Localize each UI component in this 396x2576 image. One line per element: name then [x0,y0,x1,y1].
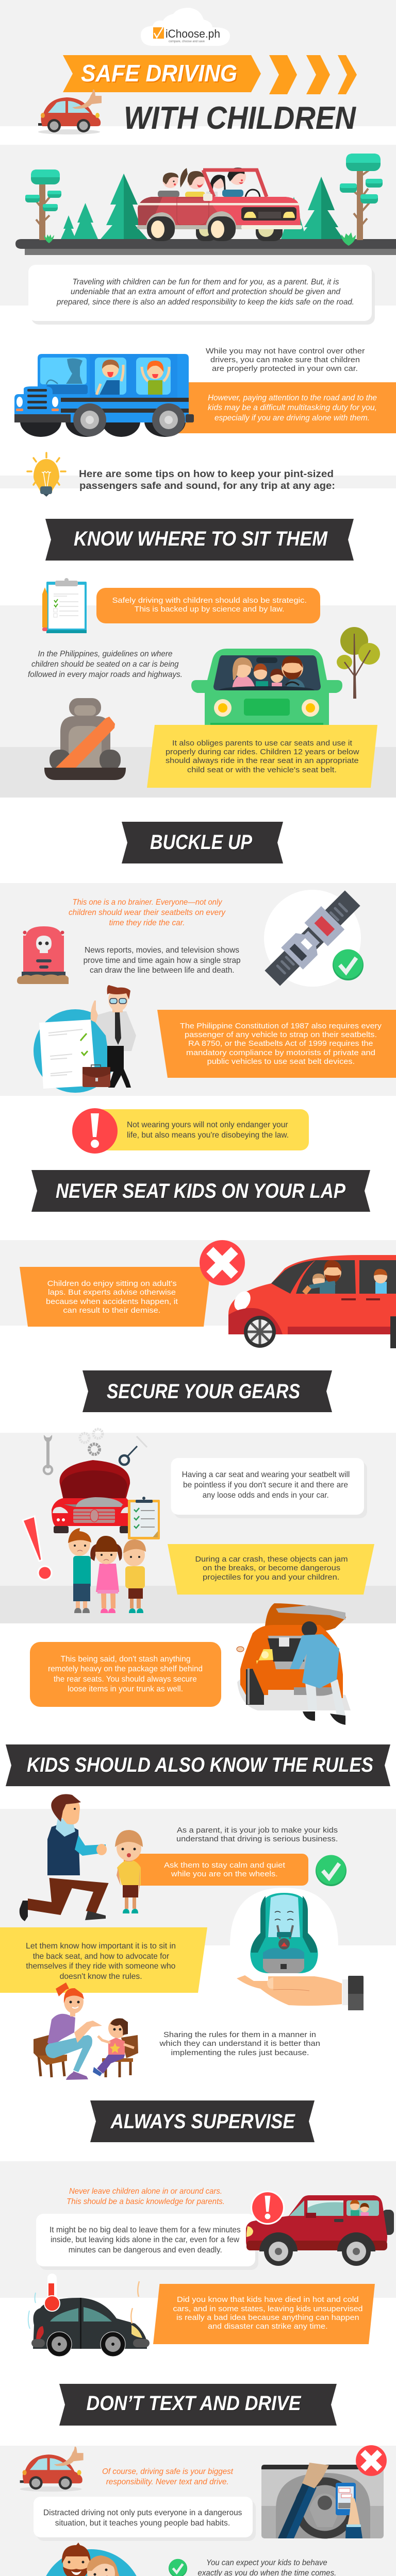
callout: dangerous projectiles: on the breaks, or become dangerous [203,1564,340,1572]
section: don't text and drive [20,2384,387,2576]
callout: car seats law: properly during car rides. Children 12 years or below [166,748,359,756]
red family car [137,167,302,241]
text: sharing the rules: Sharing the rules for them in a manner in [163,2030,316,2039]
callout: back seat: doesn't know the rules. [60,1972,142,1981]
icon: exclamation [23,1516,52,1580]
callout: strategic: This is backed up by science and by law. [134,605,285,614]
text: news reports: can draw the line between life and death. [90,966,235,975]
heading banner: SECURE YOUR GEARS [107,1380,300,1403]
text: never leave children [67,2187,225,2206]
callout: back seat [0,1927,207,1993]
callout: car seats law: child seat or with the vehicle's seat belt. [187,766,337,774]
icon: clipboard [42,578,87,633]
callout: back seat: the back seat, and how to advocate for [33,1952,170,1961]
heading banner [90,2100,315,2142]
callout: constitution and RA 8750: mandatory compliance by motorists of private and [186,1048,375,1057]
callout: constitution and RA 8750: RA 8750, or the Seatbelts Act of 1999 requires the [188,1039,373,1048]
callout: constitution and RA 8750: The Philippine Constitution of 1987 also requires every [180,1022,382,1030]
text: philippine guidelines: followed in every major roads and highways. [28,670,183,679]
logo cloud: compare, choose and save [169,40,205,43]
heading banner: ALWAYS SUPERVISE [110,2110,295,2133]
text: never leave children: This should be a basic knowledge for parents. [67,2197,225,2206]
icon: green car front with family [191,649,342,725]
text: sharing the rules [159,2030,320,2057]
heading banner [45,519,354,561]
panel: multitasking callout: kids may be a difficult multitasking duty for you, [208,403,377,412]
callout: back seat: themselves if they ride with someone who [26,1962,175,1971]
text: other drivers: drivers, you can make sure that children [210,355,360,364]
panel: multitasking callout: especially if you are driving alone with them. [214,414,370,422]
callout: dangerous projectiles [168,1544,374,1595]
girl in window [142,361,169,395]
icon: tree [337,627,380,698]
chairs [34,2035,138,2077]
illustration: dark car with thermometer [28,2274,150,2357]
panel: multitasking callout [175,382,396,433]
heading banner [82,1370,332,1412]
text: other drivers: While you may not have control over other [206,347,365,355]
text: philippine guidelines [28,650,183,679]
callout: car seats law: should always ride in the rear seat in an appropriate [166,756,359,765]
hero road scene [15,154,396,255]
card: loose odds and ends [171,1458,367,1518]
callout: hot and cold cars: is really a bad idea because anything can happen [176,2313,359,2322]
icon: car seat with belt [44,698,126,780]
card: loose odds and ends: be pointless if you don't secure it and there are [183,1481,348,1489]
callout: hot and cold cars: and disaster can strike any time. [208,2322,328,2331]
title banner: SAFE DRIVING [81,60,237,87]
callout: package shelf: This being said, don't stash anything [61,1655,191,1664]
callout: hot and cold cars: Did you know that kids have died in hot and cold [177,2295,359,2304]
text: no brainer: children should wear their seatbelts on every [69,908,226,917]
illustration: man loading orange car trunk [237,1603,351,1725]
text: philippine guidelines: children should be seated on a car is being [31,660,179,669]
illustration: listening boy [115,1830,143,1913]
text: news reports: prove time and time again how a single strap [84,956,241,965]
callout: back seat: Let them know how important it is to sit in [26,1942,176,1951]
callout: strategic [96,588,320,623]
text: other drivers [206,347,365,373]
icon: light bulb [27,453,65,497]
text: news reports [84,946,241,975]
icon: red cross [200,1240,245,1285]
illustration: flying tools [44,1429,147,1474]
title banner [63,55,357,94]
icon: green check [316,1855,346,1886]
section: never seat kids on your lap [20,1170,396,1348]
family in windshield [232,656,305,690]
callout: stay calm: while you are on the wheels. [171,1870,278,1878]
heading banner [59,2384,337,2426]
text: serious business [176,1826,338,1843]
callout: disobeying the law [72,1108,309,1154]
illustration: family in blue circle [40,2543,143,2576]
illustration: red car with parent and child [228,1255,396,1348]
card: loose odds and ends: Having a car seat and wearing your seatbelt will [182,1470,350,1479]
intro text: prepared, since there is also an added responsibility to keep the kids safe on the road. [56,298,354,307]
text: serious business: As a parent, it is your job to make your kids [177,1826,338,1835]
heading banner [6,1744,390,1786]
callout: dangerous projectiles: projectiles for you and your children. [203,1573,339,1582]
intro card [28,265,375,325]
section: always supervise [28,2100,394,2357]
section: secure your gears [23,1370,374,1725]
text: no brainer: This one is a no brainer. Everyone—not only [72,898,222,907]
card: dangerous and deadly: It might be no big deal to leave them for a few minutes [50,2226,241,2234]
tips lead-in [79,469,335,492]
callout: package shelf: loose items in your trunk as well. [68,1685,183,1693]
text: sharing the rules: which they can understand it is better than [159,2039,320,2048]
card: distracted driving [34,2497,256,2541]
tips lead-in: Here are some tips on how to keep your pint-sized [79,469,334,480]
driver and child [304,1260,387,1294]
heading banner: DON’T TEXT AND DRIVE [87,2392,302,2415]
tips lead-in: passengers safe and sound, for any trip at any age: [79,481,335,492]
card: dangerous and deadly: minutes can be dangerous and even deadly. [69,2246,222,2255]
boy in window [96,360,123,395]
card: dangerous and deadly [36,2214,258,2270]
title: with children: WITH CHILDREN [124,100,356,136]
callout: package shelf [30,1642,221,1707]
logo cloud [141,8,230,46]
text: no brainer: time they ride the car. [109,919,185,927]
icon: tombstone [17,926,69,984]
card: dangerous and deadly: inside, but leaving kids alone in the car, even for a few [51,2235,239,2244]
icon: checklist clipboard [128,1497,160,1539]
logo cloud: iChoose.ph [166,27,220,40]
heading banner: NEVER SEAT KIDS ON YOUR LAP [56,1180,345,1202]
heading banner: BUCKLE UP [150,831,252,854]
illustration: three worried kids [68,1528,146,1613]
icon: seat belt buckle [261,887,364,990]
callout: stay calm: Ask them to stay calm and quiet [164,1861,286,1870]
callout: demise: Children do enjoy sitting on adult's [47,1279,177,1288]
intro text [56,278,354,307]
callout: constitution and RA 8750: passenger of any vehicle to strap on their seatbelts. [185,1030,377,1039]
kids in rear window [350,2200,369,2216]
callout: stay calm [124,1854,308,1886]
callout: dangerous projectiles: During a car crash, these objects can jam [195,1555,348,1564]
section: know where to sit them [28,519,380,788]
illustration: child seat on hand [230,1888,364,2010]
heading banner [31,1170,370,1212]
icon: small green check [169,2559,187,2576]
right trees [281,154,383,246]
callout: constitution and RA 8750 [157,1010,396,1078]
illustration: kneeling father [20,1794,109,1921]
panel: multitasking callout: However, paying attention to the road and to the [208,394,377,402]
callout: demise: can result to their demise. [63,1306,160,1315]
callout: package shelf: remotely heavy on the package shelf behind [48,1665,203,1673]
text: serious business: understand that driving is serious business. [176,1835,338,1843]
text: never leave children: Never leave children alone in or around cars. [69,2187,222,2196]
illustration: red SUV with kids inside [246,2191,394,2266]
text: news reports: News reports, movies, and television shows [85,946,239,955]
text: no brainer [69,898,226,927]
heading banner: KNOW WHERE TO SIT THEM [74,528,328,550]
text: philippine guidelines: In the Philippines, guidelines on where [38,650,173,658]
icon: small car with thumbs up [38,90,102,134]
illustration: man with document [34,985,136,1093]
intro text: Traveling with children can be fun for them and for you, as a parent. But, it is [72,278,339,286]
text: biggest responsibility: Of course, driving safe is your biggest [102,2467,234,2476]
icon: blue bus with children [14,354,194,437]
family members [158,167,260,198]
illustration: red car with open hood [52,1460,133,1533]
card: distracted driving: Distracted driving not only puts everyone in a dangerous [43,2509,242,2517]
text: sharing the rules: implementing the rules just because. [171,2048,309,2057]
callout: disobeying the law: life, but also means you're disobeying the law. [127,1131,289,1140]
card: distracted driving: situation, but it teaches young people bad habits. [55,2519,230,2528]
callout: package shelf: the rear seats. You should always secure [54,1675,197,1684]
text: behave: You can expect your kids to behave [206,2558,327,2567]
callout: constitution and RA 8750: public vehicles to use seat belt devices. [207,1057,355,1066]
text: biggest responsibility: responsibility. Never text and drive. [106,2478,229,2486]
callout: car seats law [147,725,377,788]
section: kids should also know the rules [0,1744,390,2080]
callout: strategic: Safely driving with children should also be strategic. [112,596,307,605]
callout: disobeying the law: Not wearing yours will not only endanger your [127,1121,288,1129]
heading banner [122,822,283,863]
road [15,239,396,255]
illustration: mother and child on chairs [34,1982,138,2080]
text: other drivers: are properly protected in your own car. [212,364,358,373]
illustration: hands on wheel texting [261,2445,387,2538]
callout: demise [20,1267,211,1327]
text: biggest responsibility [102,2467,234,2486]
text: behave [197,2558,336,2576]
callout: demise: because when accidents happen, it [46,1297,178,1306]
card: loose odds and ends: any loose odds and ends in your car. [203,1491,329,1500]
callout: hot and cold cars: cars, and in some states, leaving kids unsupervised [173,2304,363,2313]
section: buckle up [17,822,396,1154]
callout: demise: laps. But experts advise otherwise [48,1288,176,1297]
seated child [93,2018,134,2076]
callout: hot and cold cars [153,2284,375,2344]
intro text: undeniable that an extra amount of effort and protection should be given and [71,287,341,296]
left trees [25,170,147,243]
icon: small car with thumbs up [20,2447,84,2492]
callout: car seats law: It also obliges parents to use car seats and use it [172,739,353,748]
